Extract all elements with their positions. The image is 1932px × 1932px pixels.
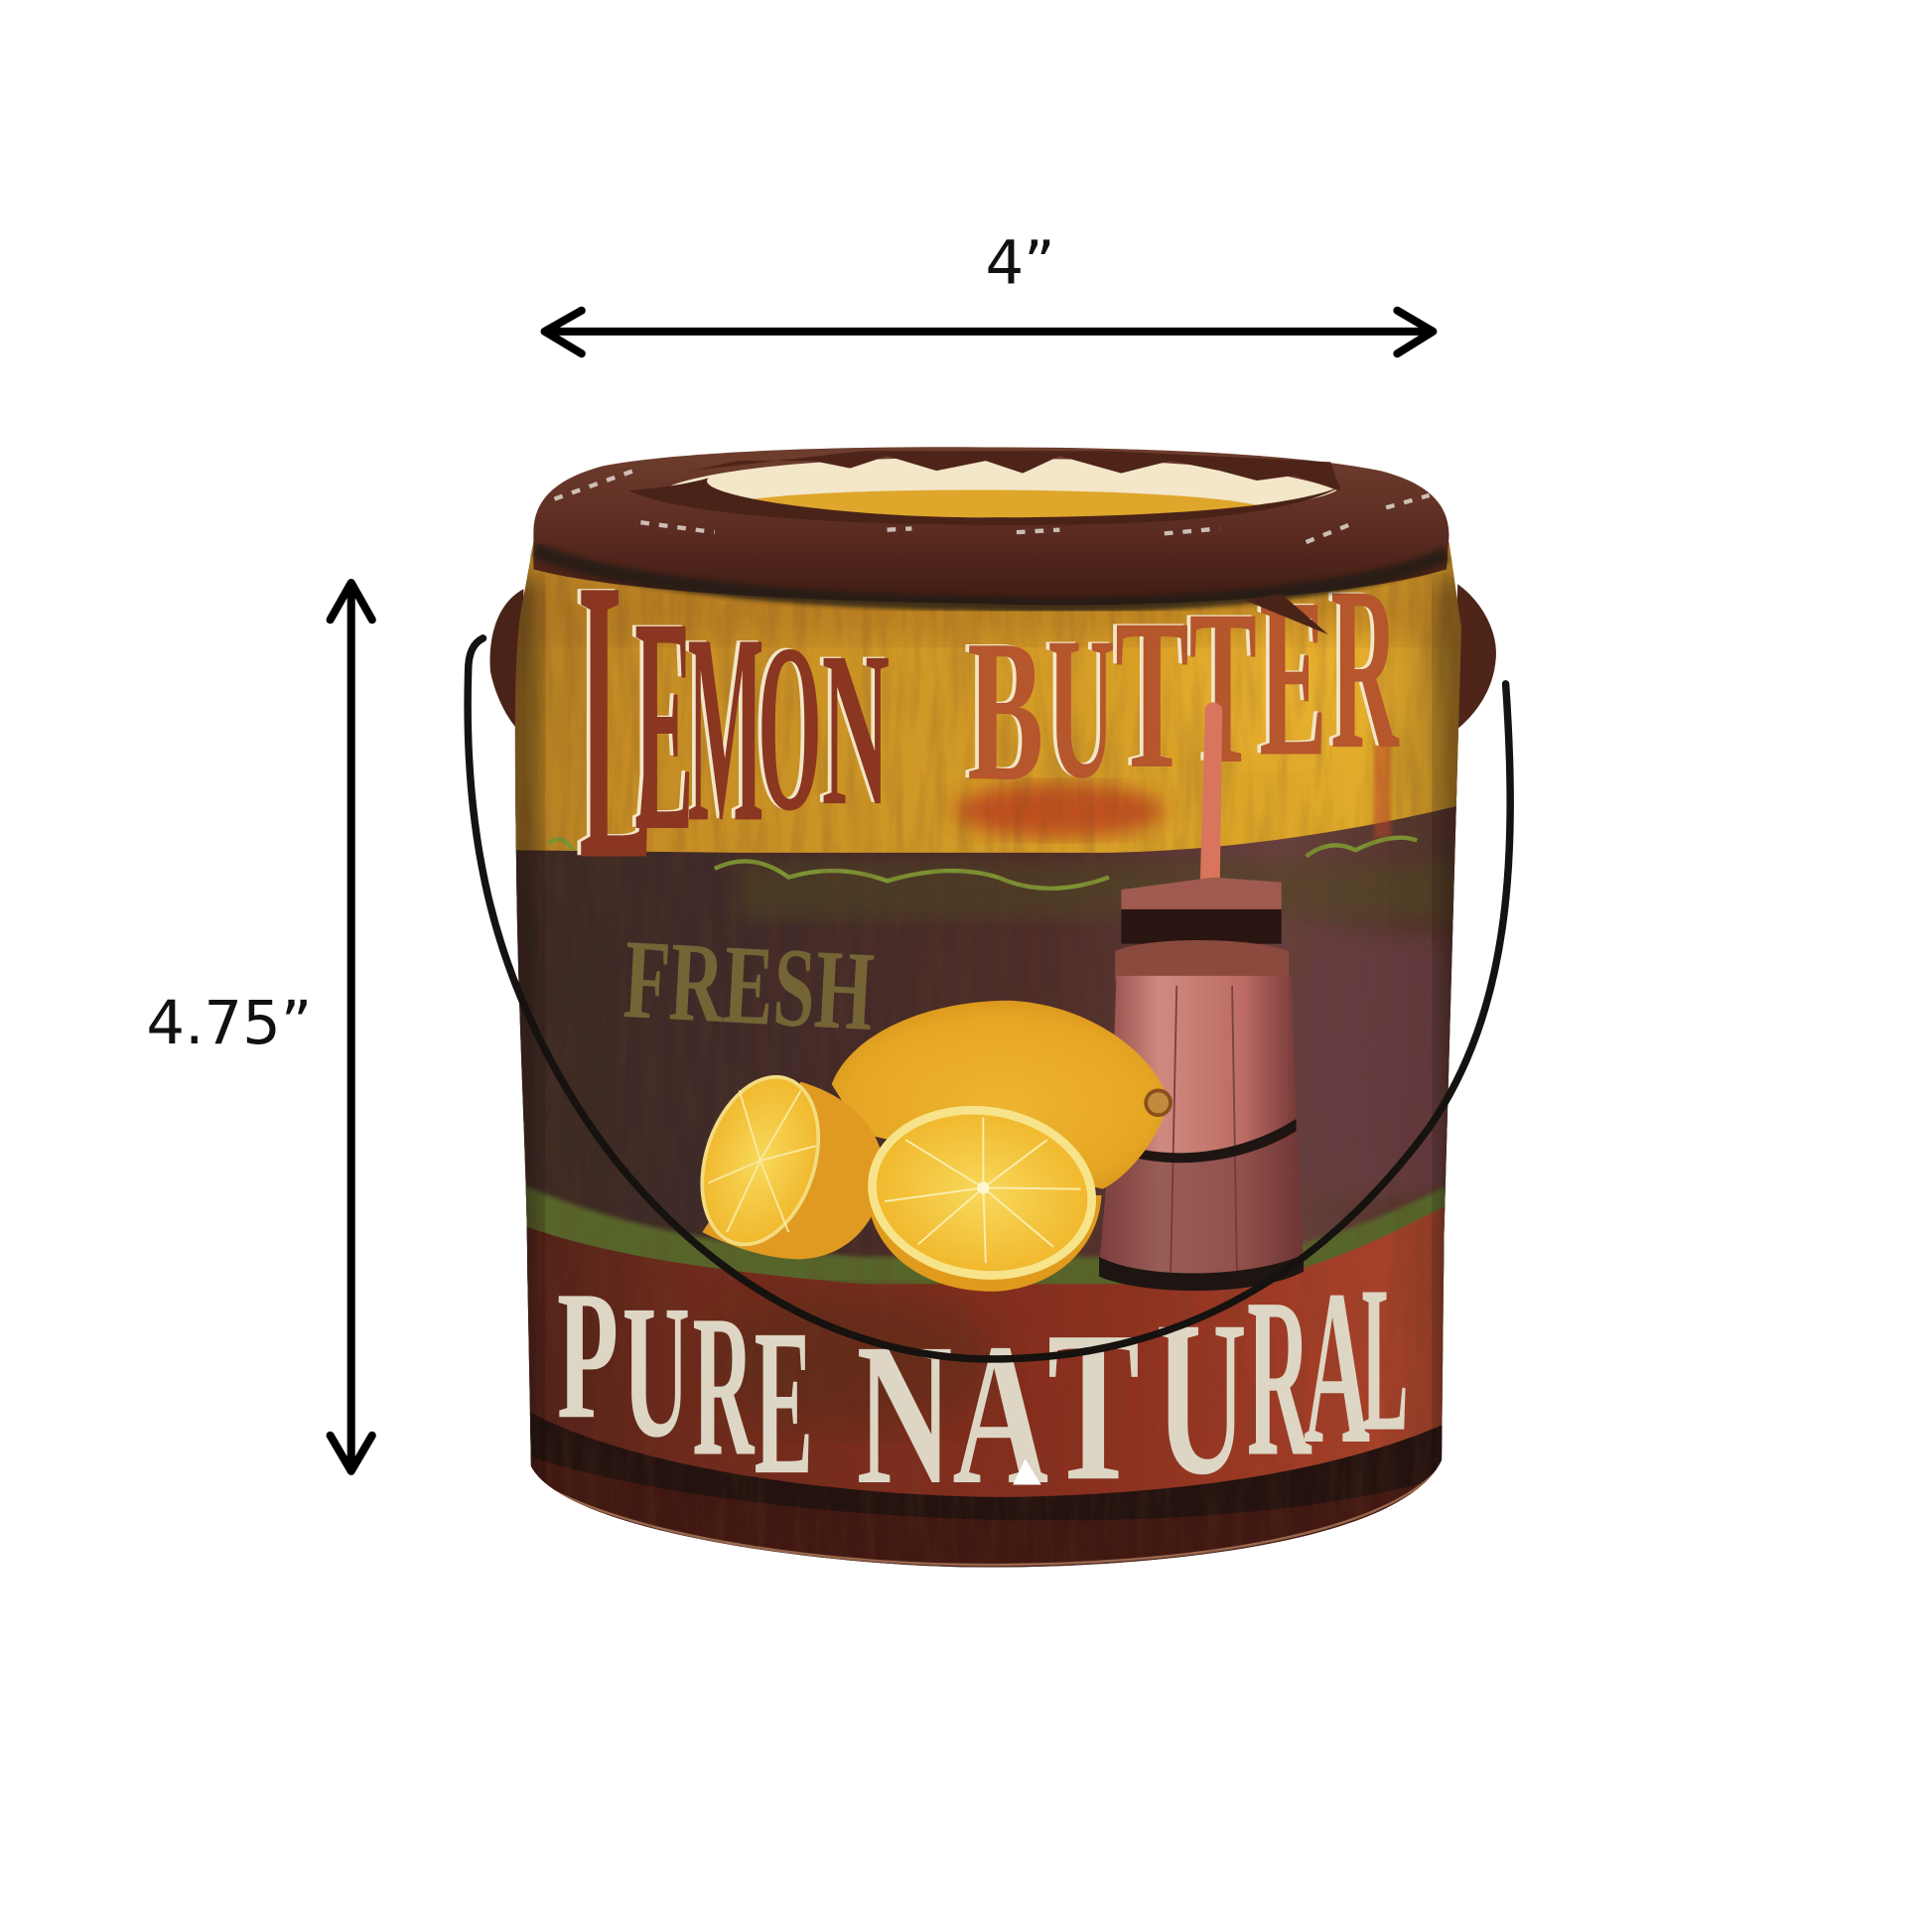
label text: LEMON BUTTER: T [1189,565,1257,810]
label text: PURE NATURAL: N [857,1303,952,1527]
label text: PURE NATURAL: P [557,1253,619,1457]
label text: PURE NATURAL: R [1247,1250,1311,1503]
lemon half segments [709,1090,816,1232]
churn neck [1121,909,1282,944]
slice segments [885,1118,1080,1263]
side shading left [514,568,546,1479]
churn base hoop [1099,1254,1304,1291]
label text: LEMON BUTTER: N [822,607,890,852]
red band shading [702,1294,998,1430]
churn stave body [1099,976,1304,1287]
label text: PURE NATURAL: U [622,1266,690,1477]
churn handle [1200,702,1222,890]
churn second lid [1115,940,1289,981]
olive stripe [740,863,1466,919]
label text: PURE NATURAL: R [692,1274,755,1498]
wire handle [468,638,1510,1359]
dark label band [492,788,1478,1282]
candle tin body: R [1327,538,1396,797]
copper base edge [542,1472,1436,1565]
cut lemon half [682,1062,885,1260]
yellow label band [492,542,1478,863]
churn lower shadow [1099,1124,1304,1287]
label text: LEMON BUTTER: E [634,555,694,896]
label text: LEMON BUTTER highlights [578,589,1380,856]
churn hoop [1111,1119,1297,1163]
infographic: candle dimensions [149,239,1514,1568]
painted streak texture [505,542,1478,1578]
plum patch [1307,936,1448,1195]
rim crack [1244,594,1328,634]
label text: PURE NATURAL: E [755,1286,813,1518]
red label band [526,1206,1446,1528]
icon: left handle ear [490,589,523,735]
width arrow [545,311,1433,353]
butter churn [1099,702,1304,1291]
label text: LEMON BUTTER highlights: O [755,594,818,860]
width label: 4” [986,228,1055,298]
tin opening [665,458,1337,520]
wavy green ornament [548,838,1417,889]
yellow band shading [517,579,1466,838]
inner rim band [628,479,1343,525]
churn staves [1171,986,1237,1282]
label text: LEMON BUTTER: O [758,595,822,861]
candle tin body [514,542,1461,1568]
label text: LEMON BUTTER highlights: L [576,492,649,943]
worn white chips [554,469,1430,542]
label text: LEMON BUTTER: M [688,579,763,879]
label text: LEMON BUTTER highlights: T [1111,573,1185,812]
lemon nub [1146,1090,1171,1115]
label text: LEMON BUTTER highlights: U [1043,596,1111,820]
slice skin [868,1195,1102,1292]
jagged paint edge [690,451,1340,490]
label text: PURE NATURAL: A [1304,1245,1370,1490]
label text: LEMON BUTTER: T [1115,574,1189,813]
lemon slice [857,1091,1108,1294]
label text: FRESH: FRESH [621,916,877,1054]
height arrow [331,583,372,1471]
base brown rim [530,1456,1425,1568]
label text: LEMON BUTTER highlights: E [630,554,690,895]
icon: right handle ear [1453,584,1496,732]
body base colour [492,530,1478,1589]
label text: LEMON BUTTER highlights: M [684,578,760,878]
label text: LEMON BUTTER: L [579,494,653,945]
label text: LEMON BUTTER highlights: T [1185,564,1253,809]
wax surface [740,489,1257,517]
whole lemon [832,1001,1171,1189]
label text: LEMON BUTTER: E [1259,551,1327,804]
rim of tin [533,447,1449,634]
label text: LEMON BUTTER highlights: B [964,598,1039,822]
churn top lid [1121,878,1282,914]
height label: 4.75” [146,989,312,1058]
label text: LEMON BUTTER highlights: E [1256,549,1323,802]
dark base stripe [517,1405,1460,1521]
rim shadow line [535,550,1447,605]
side shading right [1432,569,1461,1475]
label text: PURE NATURAL: A [952,1303,1048,1527]
chip in label [1013,1458,1041,1484]
label text: PURE NATURAL: T [1047,1286,1140,1525]
green shelf strip [526,1184,1446,1285]
candle tin body: L [1361,1243,1409,1475]
label text: PURE NATURAL: U [1156,1276,1247,1521]
candle tin body: R [1330,539,1400,798]
label text: LEMON BUTTER: U [1047,597,1115,821]
label text: LEMON BUTTER highlights: N [818,606,886,851]
slice face [857,1091,1108,1294]
label text: LEMON BUTTER [581,590,1400,856]
lemon half face [682,1062,839,1260]
label text: LEMON BUTTER: B [967,599,1043,823]
